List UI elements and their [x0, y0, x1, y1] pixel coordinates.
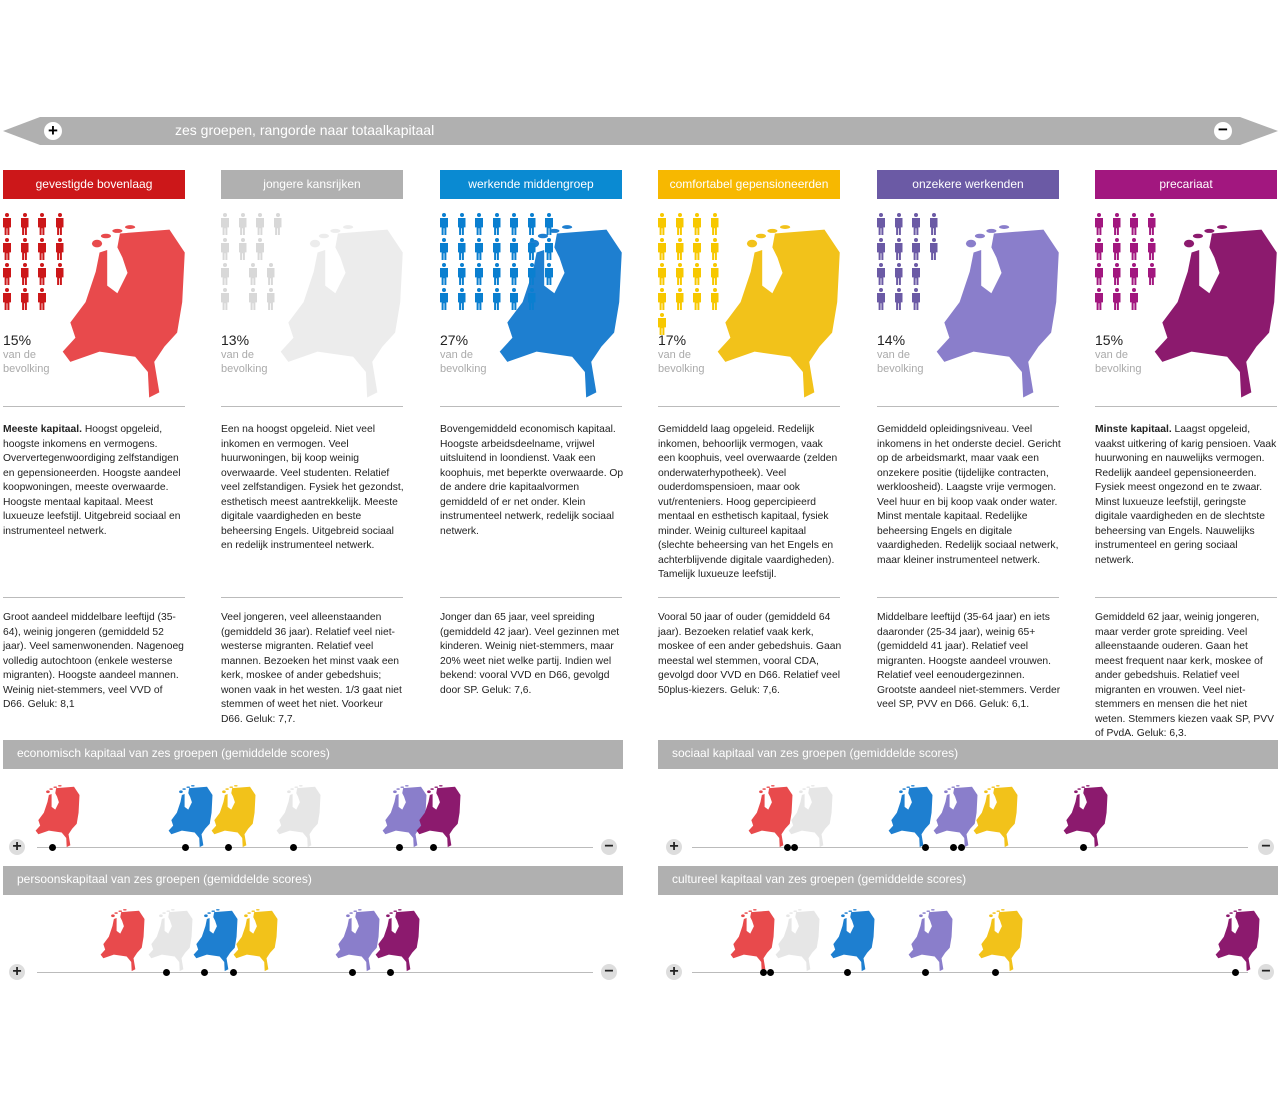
chart: persoonskapitaal [3, 866, 623, 980]
chart: economisch kapitaal: − [604, 838, 614, 855]
panel: gevestigde bovenlaag [2, 170, 185, 710]
chart: economisch kapitaal: economisch kapitaal van zes groepen (gemiddelde scores) [17, 746, 330, 760]
panel: onzekere werkenden: Middelbare leeftijd (35-64 jaar) en iets daaronder (25-34 jaar), weinig 65+ (gemiddeld 41 jaar). Relatief veel migranten. Hoogste aandeel vrouwen. Relatief veel eenoudergezinnen. Grootste aandeel niet-stemmers. Verder veel SP, PVV en D66. Geluk: 6,1. [877, 612, 1060, 710]
chart: economisch kapitaal [3, 740, 623, 855]
panel: gevestigde bovenlaag: gevestigde bovenlaag [36, 177, 152, 191]
panel: precariaat: Minste kapitaal. Laagst opgeleid, vaakst uitkering of karig pensioen. Vaak huurwoning en nauwelijks vermogen. Redelijk aandeel gepensioneerden. Fysiek meest ongezond en te zwaar. Minst luxueuze leefstijl, geringste digitale vaardigheden en de slechtste beheersing van Engels. Nauwelijks instrumenteel en gering sociaal netwerk. [1095, 424, 1276, 566]
minus icon: − [1218, 120, 1228, 139]
panel: comfortabel gepensioneerden: bevolking [658, 363, 704, 375]
panel: precariaat: precariaat [1159, 177, 1213, 191]
plus icon [44, 122, 62, 140]
panel: precariaat: Gemiddeld 62 jaar, weinig jongeren, maar verder grote spreiding. Veel alleenstaande ouderen. Gaan het meest frequent naar kerk, moskee of ander gebedshuis. Relatief veel migranten en vrouwen. Veel niet-stemmers en mensen die het niet weten. Stemmers kiezen vaak SP, PVV of PvdA. Geluk: 6,3. [1095, 612, 1274, 739]
chart: cultureel kapitaal: − [1261, 963, 1271, 980]
chart: cultureel kapitaal [658, 866, 1278, 980]
panel: comfortabel gepensioneerden: van de [658, 349, 691, 361]
panel: werkende middengroep: bevolking [440, 363, 486, 375]
panel: jongere kansrijken [221, 170, 404, 724]
banner title: zes groepen, rangorde naar totaalkapitaal [175, 122, 434, 138]
chart: persoonskapitaal: + [12, 963, 22, 980]
panel: jongere kansrijken: jongere kansrijken [263, 177, 361, 191]
panel: comfortabel gepensioneerden: Vooral 50 jaar of ouder (gemiddeld 64 jaar). Bezoeken relatief vaak kerk, moskee of een ander gebedshuis. Gaan meestal wel stemmen, vooral CDA, gevolgd door VVD en D66. Relatief veel 50plus-kiezers. Geluk: 7,6. [658, 612, 841, 696]
panel: onzekere werkenden: bevolking [877, 363, 923, 375]
panel: comfortabel gepensioneerden: comfortabel gepensioneerden [670, 177, 828, 191]
panel: precariaat: van de [1095, 349, 1128, 361]
panel: gevestigde bovenlaag: bevolking [3, 363, 49, 375]
panel: jongere kansrijken: bevolking [221, 363, 267, 375]
panel: gevestigde bovenlaag: 15% [3, 332, 31, 348]
chart: persoonskapitaal: persoonskapitaal van zes groepen (gemiddelde scores) [17, 872, 312, 886]
panel: werkende middengroep: 27% [440, 332, 468, 348]
panel: comfortabel gepensioneerden: Gemiddeld laag opgeleid. Redelijk inkomen, behoorlijk vermogen, vaak een koophuis, veel overwaarde (zelden onderwaterhypotheek). Veel ouderdomspensioen, maar ook vut/renteniers. Hoog gepercipieerd mentaal en esthetisch kapitaal, fysiek minder. Weinig cultureel kapitaal (slechte beheersing van het Engels en achterblijvende digitale vaardigheden). Tamelijk luxueuze leefstijl. [658, 424, 837, 580]
plus icon: + [48, 121, 58, 140]
chart: sociaal kapitaal: − [1261, 838, 1271, 855]
chart: sociaal kapitaal [658, 740, 1278, 855]
chart: cultureel kapitaal: + [669, 963, 679, 980]
panel: precariaat: 15% [1095, 332, 1123, 348]
panel: comfortabel gepensioneerden [658, 170, 841, 696]
panel: onzekere werkenden: onzekere werkenden [912, 177, 1024, 191]
panel: onzekere werkenden: Gemiddeld opleidingsniveau. Veel inkomens in het onderste deciel. Gericht op de arbeidsmarkt, maar vaak een onzekere positie (tijdelijke contracten, werkloosheid). Laagste vrije vermogen. Veel huur en bij koop vaak onder water. Minst mentale kapitaal. Redelijke beheersing Engels en digitale vaardigheden. Redelijk sociaal netwerk, maar kleiner instrumenteel netwerk. [877, 424, 1061, 566]
chart: cultureel kapitaal: cultureel kapitaal van zes groepen (gemiddelde scores) [672, 872, 966, 886]
panel: onzekere werkenden: 14% [877, 332, 905, 348]
panel: onzekere werkenden [877, 170, 1061, 710]
panel: werkende middengroep: werkende middengroep [468, 177, 594, 191]
panel: comfortabel gepensioneerden: 17% [658, 332, 686, 348]
panel: gevestigde bovenlaag: Groot aandeel middelbare leeftijd (35-64), weinig jongeren (gemiddeld 52 jaar). Veel samenwonenden. Nagenoeg volledig autochtoon (enkele westerse migranten). Hoogste aandeel mannen. Weinig niet-stemmers, veel VVD of D66. Geluk: 8,1 [3, 612, 184, 710]
panel: gevestigde bovenlaag: van de [3, 349, 36, 361]
panel: werkende middengroep [440, 170, 623, 696]
chart: sociaal kapitaal: + [669, 838, 679, 855]
chart: sociaal kapitaal: sociaal kapitaal van zes groepen (gemiddelde scores) [672, 746, 958, 760]
chart: economisch kapitaal: + [12, 838, 22, 855]
panel: onzekere werkenden: van de [877, 349, 910, 361]
panel: jongere kansrijken: 13% [221, 332, 249, 348]
panel: precariaat: bevolking [1095, 363, 1141, 375]
chart: persoonskapitaal: − [604, 963, 614, 980]
panel: jongere kansrijken: Veel jongeren, veel alleenstaanden (gemiddeld 36 jaar). Relatief veel niet-westerse migranten. Relatief veel mannen. Bezoeken het minst vaak een kerk, moskee of ander gebedshuis; wonen vaak in het westen. 1/3 gaat niet stemmen of weet het niet. Voorkeur D66. Geluk: 7,7. [221, 612, 402, 724]
minus icon [1214, 122, 1232, 140]
panel: werkende middengroep: Bovengemiddeld economisch kapitaal. Hoogste arbeidsdeelname, vrijwel uitsluitend in loondienst. Vaak een koophuis, met beperkte overwaarde. Op de andere drie kapitaalvormen gemiddeld of er net onder. Klein instrumenteel netwerk, redelijk sociaal netwerk. [440, 424, 623, 536]
panel: jongere kansrijken: Een na hoogst opgeleid. Niet veel inkomen en vermogen. Veel huurwoningen, bij koop weinig overwaarde. Veel studenten. Relatief veel zelfstandigen. Fysiek het gezondst, esthetisch meest aantrekkelijk. Meeste digitale vaardigheden en beste beheersing Engels. Uitgebreid sociaal en redelijk instrumenteel netwerk. [221, 424, 404, 551]
panel: jongere kansrijken: van de [221, 349, 254, 361]
top arrow: ranking banner [3, 117, 1278, 145]
panel: werkende middengroep: Jonger dan 65 jaar, veel spreiding (gemiddeld 42 jaar). Veel gezinnen met kinderen. Weinig niet-stemmers, maar 20% weet niet welke partij. Indien wel bekend: vooral VVD en D66, gevolgd door SP. Geluk: 7,6. [440, 612, 619, 696]
panel: gevestigde bovenlaag: Meeste kapitaal. Hoogst opgeleid, hoogste inkomens en vermogens. Oververtegenwoordiging zelfstandigen en gepensioneerden. Hoogste aandeel koopwoningen, meeste overwaarde. Hoogste mentaal kapitaal. Meest luxueuze leefstijl. Uitgebreid sociaal en instrumenteel netwerk. [3, 424, 180, 536]
panel: precariaat [1095, 170, 1277, 739]
panel: werkende middengroep: van de [440, 349, 473, 361]
